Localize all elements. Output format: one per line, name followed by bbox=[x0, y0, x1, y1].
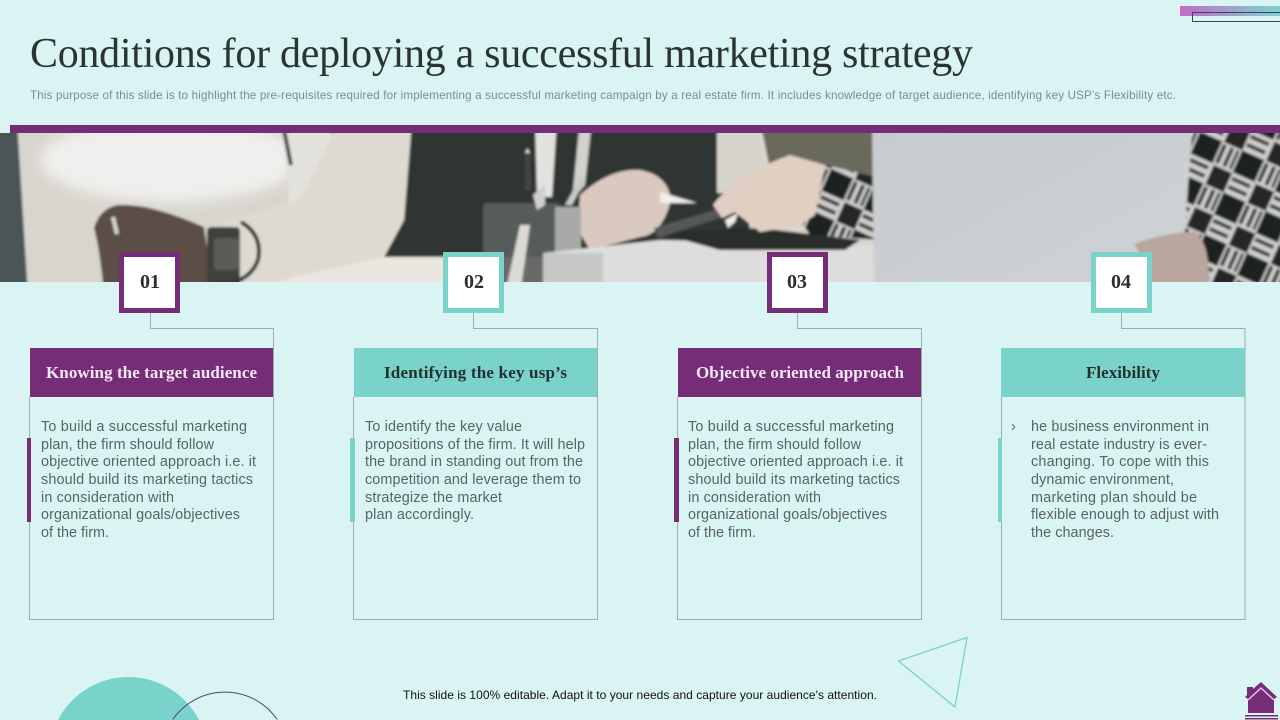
right hand bbox=[713, 155, 825, 232]
body text 1: in consideration with bbox=[41, 490, 174, 506]
hand bbox=[92, 203, 210, 282]
watch bbox=[207, 227, 240, 295]
frame and connector 2 bbox=[354, 313, 598, 620]
frame and connector 1 bbox=[30, 313, 274, 620]
body text 3 bbox=[688, 419, 903, 541]
sleeve bbox=[291, 133, 412, 254]
body text 3: in consideration with bbox=[688, 490, 821, 506]
decorative triangle bbox=[898, 638, 967, 707]
body text 3: plan, the firm should follow bbox=[688, 437, 862, 453]
header 3 bbox=[678, 348, 921, 397]
card 1: Knowing the target audience bbox=[27, 254, 274, 620]
cup and pens bbox=[482, 202, 562, 282]
header 4: Flexibility bbox=[1086, 363, 1160, 382]
body text 2: strategize the market bbox=[365, 490, 502, 506]
pen bbox=[653, 210, 721, 238]
body text 4: dynamic environment, bbox=[1031, 472, 1174, 488]
number badge 01: 01 bbox=[140, 271, 160, 293]
number badge 01 bbox=[122, 254, 178, 310]
number badge 03: 03 bbox=[787, 271, 807, 293]
papers bbox=[545, 238, 874, 282]
card 2: Identifying the key usp's bbox=[350, 254, 598, 620]
body text 3: organizational goals/objectives bbox=[688, 507, 887, 523]
photo banner: business people at a table bbox=[0, 133, 1280, 282]
header 1 bbox=[30, 348, 273, 397]
dark strip bbox=[0, 133, 29, 282]
number badge 02: 02 bbox=[464, 271, 484, 293]
body text 1: organizational goals/objectives bbox=[41, 507, 240, 523]
accent bar 4 bbox=[998, 438, 1002, 522]
olive jacket bbox=[761, 133, 874, 178]
body text 3: should build its marketing tactics bbox=[688, 472, 900, 488]
body text 4: he business environment in bbox=[1031, 419, 1209, 435]
body text 4 bbox=[1011, 419, 1219, 541]
number badge 02 bbox=[446, 254, 502, 310]
body text 2 bbox=[365, 419, 585, 523]
body text 1: objective oriented approach i.e. it bbox=[41, 454, 256, 470]
decorative teal circle bbox=[58, 677, 199, 720]
body text 1: should build its marketing tactics bbox=[41, 472, 253, 488]
dark suit bbox=[384, 120, 752, 257]
body text 4: flexible enough to adjust with bbox=[1031, 507, 1219, 523]
body text 4: › bbox=[1011, 419, 1016, 435]
left hand pale bbox=[578, 170, 671, 250]
body text 3: To build a successful marketing bbox=[688, 419, 894, 435]
accent bar 2 bbox=[350, 438, 355, 522]
body text 4: changing. To cope with this bbox=[1031, 454, 1209, 470]
number badge 03 bbox=[770, 254, 826, 310]
top purple bar bbox=[10, 125, 1280, 133]
right plaid bbox=[1183, 133, 1280, 282]
plaid sleeve bbox=[802, 165, 875, 241]
footer note: This slide is 100% editable. Adapt it to your needs and capture your audience's attention. bbox=[403, 688, 877, 702]
frame and connector 4 bbox=[1002, 313, 1245, 620]
subtitle: This purpose of this slide is to highlight the pre-requisites required for implementing a successful marketing campaign by a real estate firm. It includes knowledge of target audience, identifying key USP’s Flexibility etc. bbox=[30, 89, 1176, 102]
body text 1 bbox=[41, 419, 256, 541]
cuff bbox=[235, 222, 259, 282]
accent bar 1 bbox=[27, 438, 31, 522]
header 2 bbox=[354, 348, 597, 397]
body text 4: real estate industry is ever- bbox=[1031, 437, 1207, 453]
top right gradient decoration bbox=[1180, 6, 1280, 22]
body text 2: propositions of the firm. It will help bbox=[365, 437, 585, 453]
body text 1: of the firm. bbox=[41, 525, 109, 541]
title: Conditions for deploying a successful marketing strategy bbox=[30, 31, 973, 77]
body text 2: To identify the key value bbox=[365, 419, 522, 435]
header 2: Identifying the key usp’s bbox=[384, 363, 567, 382]
header 1: Knowing the target audience bbox=[46, 363, 257, 382]
body text 2: competition and leverage them to bbox=[365, 472, 581, 488]
header 4 bbox=[1001, 348, 1245, 397]
body text 2: plan accordingly. bbox=[365, 507, 474, 523]
tie strips bbox=[535, 120, 557, 197]
frame and connector 3 bbox=[678, 313, 922, 620]
card 3: Objective oriented approach bbox=[674, 254, 922, 620]
body text 4: marketing plan should be bbox=[1031, 490, 1197, 506]
card 4: Flexibility bbox=[998, 254, 1245, 620]
number badge 04: 04 bbox=[1111, 271, 1131, 293]
body text 3: objective oriented approach i.e. it bbox=[688, 454, 903, 470]
body text 1: To build a successful marketing bbox=[41, 419, 247, 435]
icon: home bbox=[1245, 682, 1278, 720]
accent bar 3 bbox=[674, 438, 679, 522]
white gap background bbox=[714, 133, 742, 196]
body text 1: plan, the firm should follow bbox=[41, 437, 215, 453]
decorative outline circle bbox=[173, 692, 277, 720]
number badge 04 bbox=[1094, 254, 1150, 310]
body text 2: the brand in standing out from the bbox=[365, 454, 583, 470]
hand over laptop bbox=[1134, 230, 1210, 282]
body text 3: of the firm. bbox=[688, 525, 756, 541]
body text 4: the changes. bbox=[1031, 525, 1114, 541]
laptop bbox=[870, 133, 1192, 282]
table bbox=[276, 256, 443, 282]
header 3: Objective oriented approach bbox=[696, 363, 905, 382]
tablet bbox=[655, 228, 860, 250]
white shirt bbox=[37, 133, 287, 206]
